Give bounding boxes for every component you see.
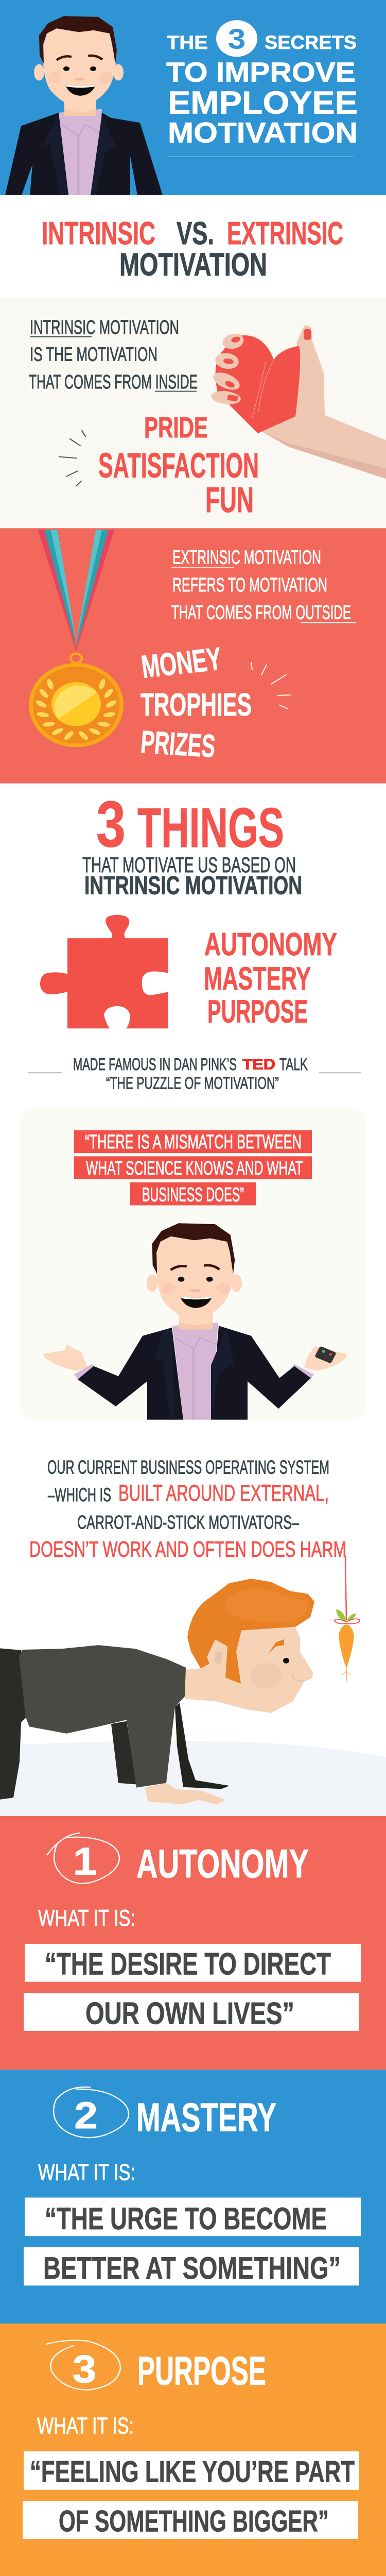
- heading: MASTERY: [136, 2095, 276, 2140]
- title: SECRETS: [265, 32, 357, 54]
- title: [166, 20, 358, 149]
- illustration: hand squeezing a heart: [210, 325, 386, 479]
- definition text: [29, 316, 198, 393]
- word list: pride, satisfaction, fun: PRIDE: [144, 411, 208, 444]
- section heading: 3 things: [82, 788, 302, 900]
- panel: 2 mastery: [0, 2070, 386, 2324]
- heading: intrinsic vs extrinsic motivation: MOTIVATION: [119, 247, 267, 283]
- numbered circle 3: 3: [73, 2347, 96, 2391]
- icon: carrot: [335, 1609, 360, 1682]
- word list: money, trophies, prizes: MONEY: [139, 641, 224, 685]
- definition text: [171, 546, 356, 623]
- title: TO IMPROVE: [166, 57, 356, 88]
- panel: intrinsic motivation: [0, 298, 386, 528]
- heading: intrinsic vs extrinsic motivation: [42, 216, 343, 283]
- title: EMPLOYEE: [168, 85, 358, 121]
- word list: autonomy, mastery, purpose: MASTERY: [204, 961, 311, 997]
- illustration: smiling businessman: [5, 16, 163, 195]
- word list: pride, satisfaction, fun: FUN: [205, 480, 254, 520]
- caption: ted talk reference: MADE FAMOUS IN DAN PINK’S: [73, 1054, 237, 1074]
- word list: money, trophies, prizes: [139, 641, 252, 765]
- illustration: shrugging speaker with phone: [43, 1223, 347, 1420]
- word list: autonomy, mastery, purpose: PURPOSE: [207, 994, 308, 1030]
- numbered circle 2: 2: [74, 2095, 98, 2137]
- panel: 3 purpose: [0, 2324, 386, 2576]
- icon: burst lines: [251, 663, 290, 709]
- badge: number 3: [216, 20, 257, 57]
- label: WHAT IT IS:: [37, 2413, 134, 2439]
- definition text: INTRINSIC MOTIVATION: [30, 316, 179, 338]
- numbered circle 1: 1: [73, 1840, 97, 1883]
- icon: puzzle piece: [40, 915, 168, 1028]
- icon: phone: [314, 1346, 337, 1364]
- definition text: THAT COMES FROM INSIDE: [29, 370, 198, 393]
- label: WHAT IT IS:: [38, 1906, 135, 1931]
- caption: ted talk reference: [28, 1054, 361, 1093]
- title: THE: [167, 32, 208, 54]
- numbered circle 1: [47, 1833, 119, 1884]
- quote: [23, 2451, 359, 2539]
- quote banner: [74, 1130, 312, 1206]
- quote: [24, 1944, 361, 2031]
- badge: number 3: 3: [228, 23, 245, 55]
- quote banner: BUSINESS DOES”: [142, 1183, 244, 1206]
- text block: business operating system statement: [29, 1457, 346, 1562]
- panel: speaker quote: [20, 1108, 365, 1420]
- caption: ted talk reference: TALK: [279, 1054, 308, 1074]
- section heading: 3 things: 3: [96, 788, 126, 861]
- heading: intrinsic vs extrinsic motivation: INTRINSIC: [42, 216, 155, 251]
- word list: money, trophies, prizes: TROPHIES: [141, 687, 252, 723]
- word list: autonomy, mastery, purpose: [204, 927, 337, 1030]
- heading: intrinsic vs extrinsic motivation: VS.: [177, 216, 214, 251]
- icon: burst lines: [59, 431, 85, 486]
- word list: money, trophies, prizes: PRIZES: [139, 724, 217, 765]
- label: WHAT IT IS:: [38, 2160, 135, 2185]
- ted logo: TED: [242, 1057, 275, 1073]
- word list: pride, satisfaction, fun: [98, 411, 259, 520]
- quote: [24, 2198, 361, 2285]
- numbered circle 3: [46, 2341, 120, 2391]
- word list: pride, satisfaction, fun: SATISFACTION: [98, 446, 259, 485]
- heading: PURPOSE: [137, 2348, 266, 2393]
- string: [345, 1556, 346, 1620]
- text block: business operating system statement: –WHICH IS: [48, 1484, 111, 1505]
- illustration: gold medal: [29, 530, 124, 747]
- numbered circle 2: [54, 2087, 129, 2138]
- section heading: 3 things: THINGS: [137, 797, 284, 859]
- panel: extrinsic motivation: [0, 528, 386, 784]
- quote: OUR OWN LIVES”: [85, 1996, 294, 2031]
- definition text: IS THE MOTIVATION: [30, 343, 157, 365]
- panel: header: [0, 0, 386, 195]
- panel: 1 autonomy: [0, 1816, 386, 2070]
- title: MOTIVATION: [168, 116, 358, 149]
- illustration: man crawling after a carrot: [0, 1556, 386, 1817]
